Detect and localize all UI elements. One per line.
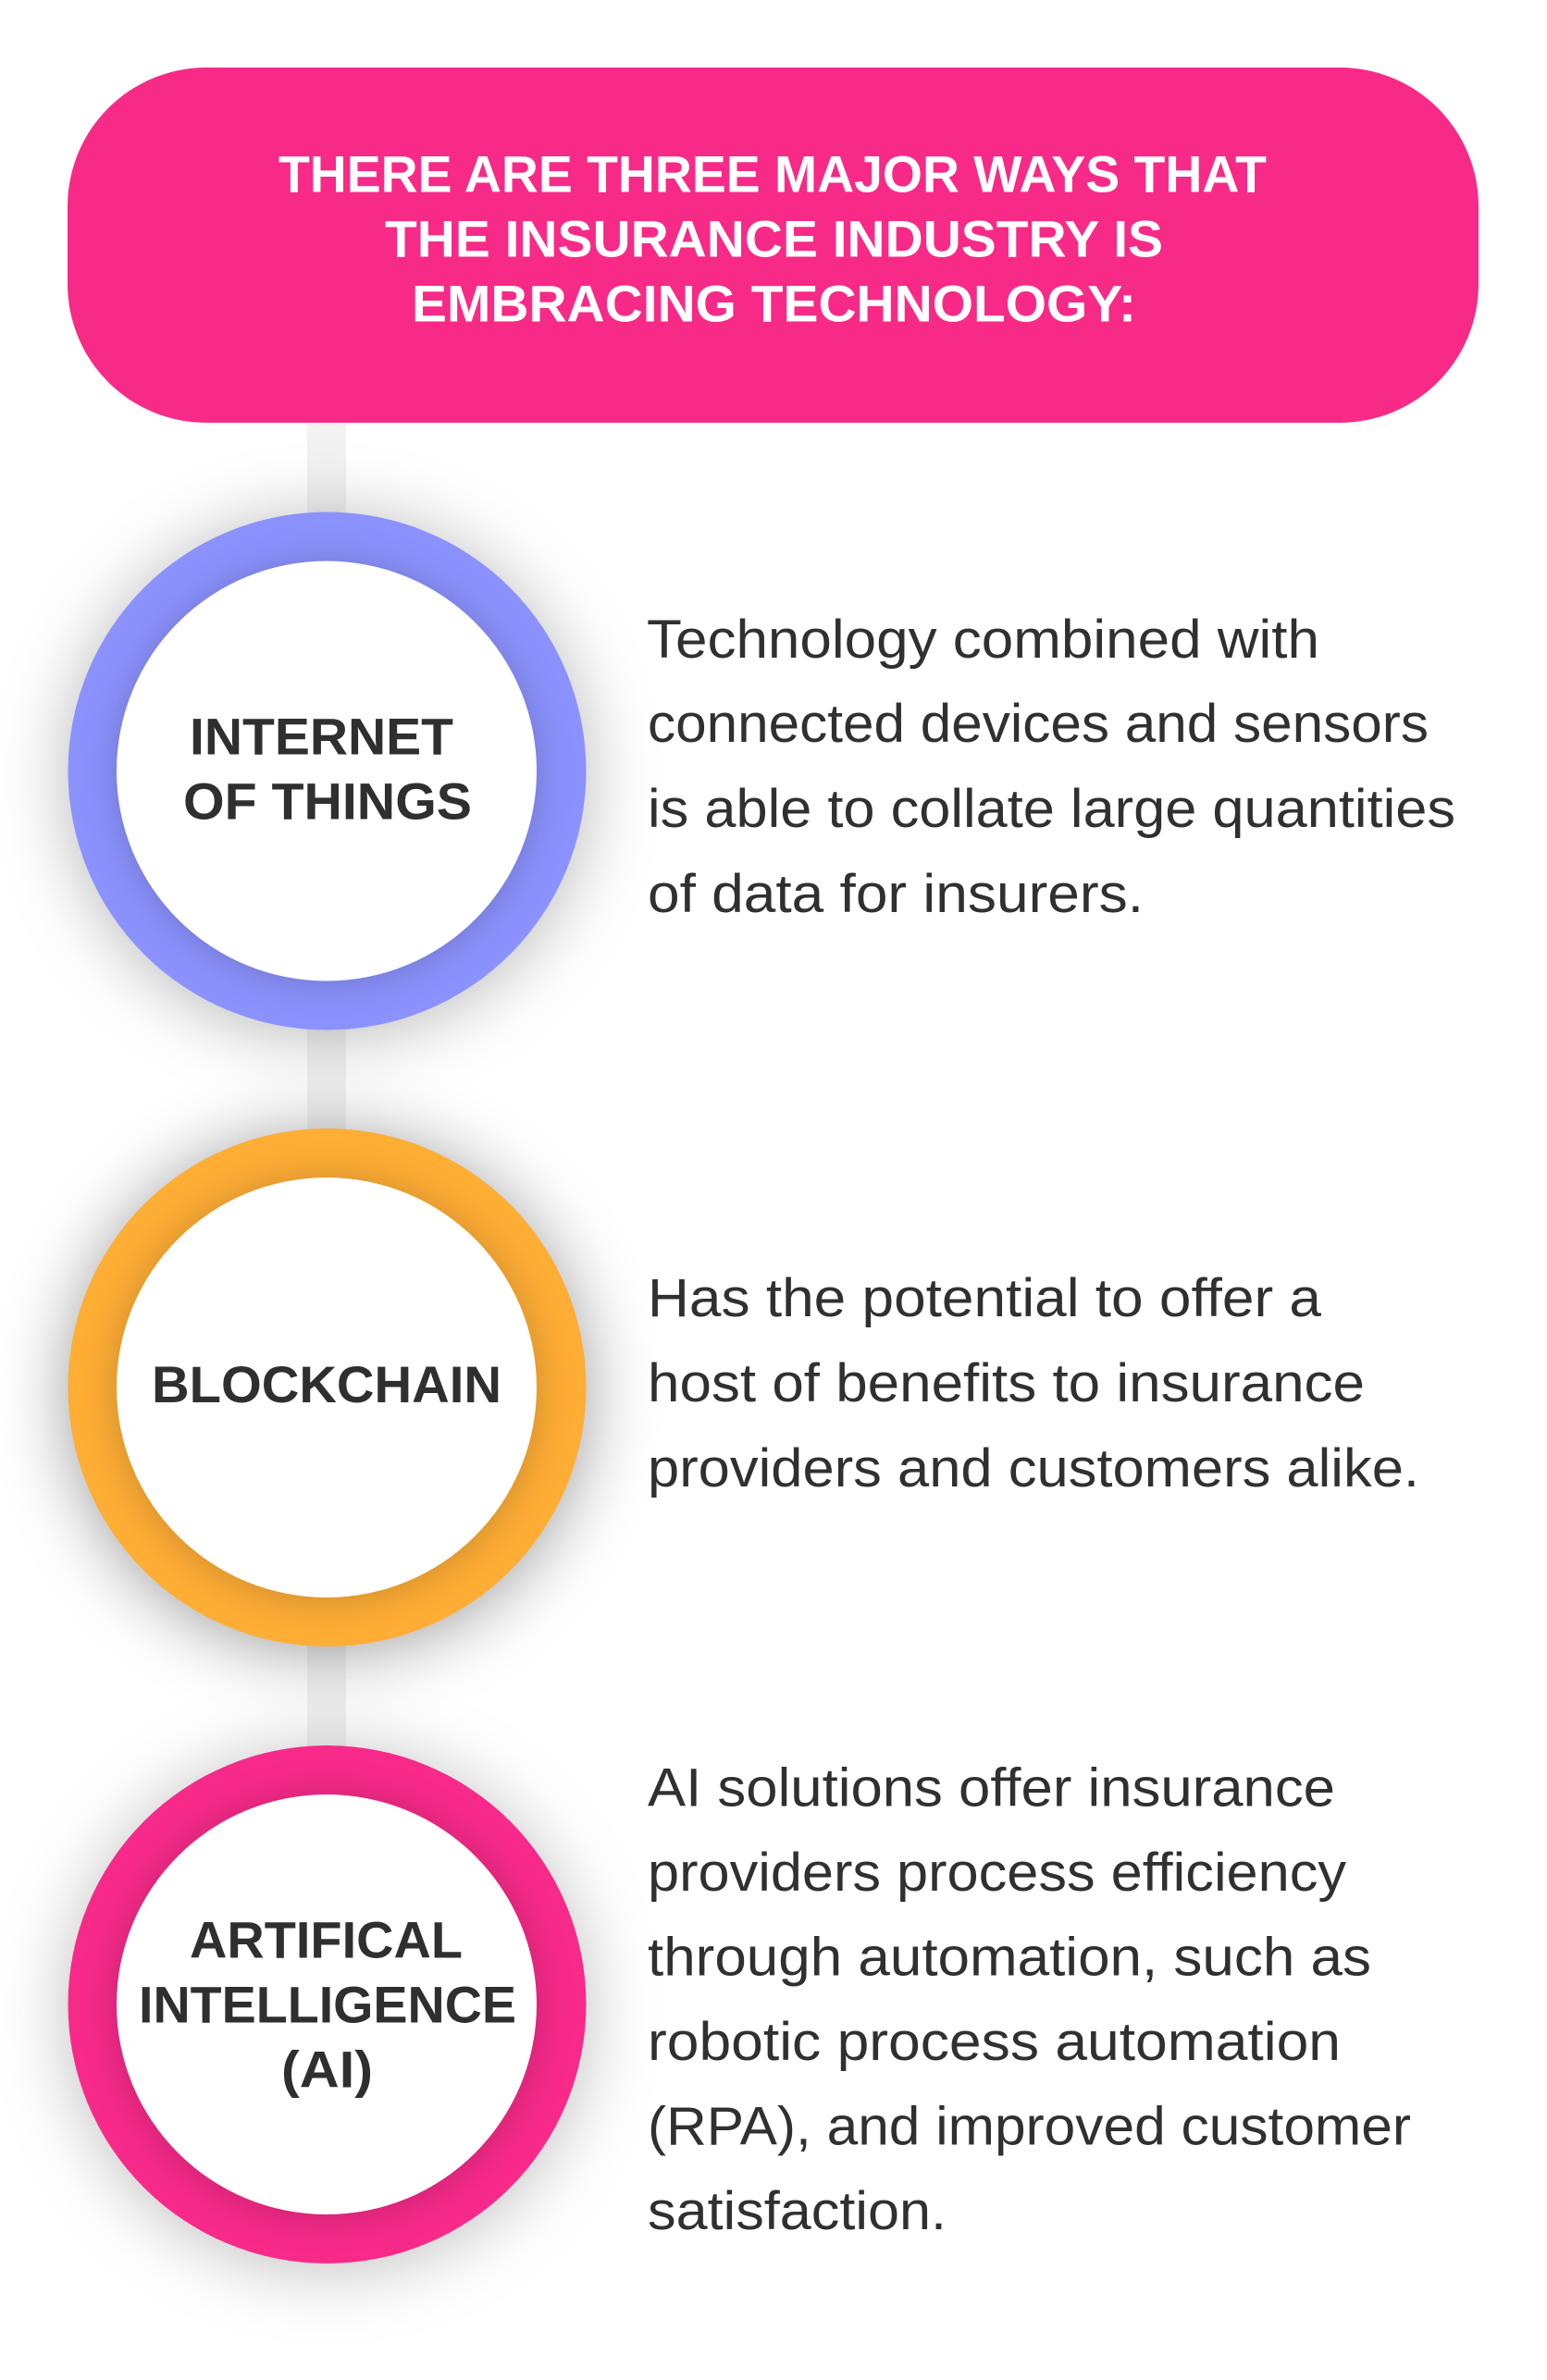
label: blockchain: BLOCKCHAIN xyxy=(152,1355,501,1413)
panel: blockchain xyxy=(68,1128,587,1646)
description: internet of things: connected devices and sensors xyxy=(648,694,1429,754)
panel: artificial intelligence xyxy=(68,1745,587,2263)
header title: THE INSURANCE INDUSTRY IS xyxy=(385,209,1163,268)
panel: internet of things xyxy=(68,512,587,1030)
ring: internet of things xyxy=(68,512,587,1030)
description: artificial intelligence: satisfaction. xyxy=(648,2181,947,2241)
description: internet of things: of data for insurers. xyxy=(648,864,1144,924)
description: artificial intelligence xyxy=(648,1757,1411,2241)
description: internet of things xyxy=(647,610,1455,924)
ring: blockchain xyxy=(68,1128,587,1646)
header banner xyxy=(68,68,1479,423)
inner disc: internet of things xyxy=(117,561,537,980)
description: blockchain: providers and customers alike. xyxy=(648,1438,1419,1498)
label: artificial intelligence: (AI) xyxy=(281,2041,373,2098)
label: artificial intelligence xyxy=(139,1911,516,2098)
header title: THERE ARE THREE MAJOR WAYS THAT xyxy=(278,144,1267,203)
description: artificial intelligence: AI solutions offer insurance xyxy=(648,1757,1335,1819)
description: artificial intelligence: providers process efficiency xyxy=(648,1843,1346,1903)
label: internet of things: OF THINGS xyxy=(183,771,472,831)
description: blockchain: Has the potential to offer a xyxy=(648,1268,1322,1328)
inner disc: artificial intelligence xyxy=(117,1794,537,2214)
description: blockchain xyxy=(648,1268,1419,1498)
description: blockchain: host of benefits to insurance xyxy=(648,1353,1365,1413)
description: internet of things: Technology combined with xyxy=(647,610,1319,670)
inner disc: blockchain xyxy=(117,1178,537,1597)
description: artificial intelligence: through automation, such as xyxy=(648,1928,1371,1987)
description: artificial intelligence: robotic process automation xyxy=(648,2012,1341,2072)
header title: EMBRACING TECHNOLOGY: xyxy=(412,274,1136,333)
description: artificial intelligence: (RPA), and improved customer xyxy=(648,2096,1411,2157)
label: artificial intelligence: ARTIFICAL xyxy=(190,1911,463,1968)
vertical connector line xyxy=(307,416,346,1767)
header title xyxy=(278,144,1267,333)
label: internet of things xyxy=(183,707,472,831)
label: artificial intelligence: INTELLIGENCE xyxy=(139,1976,516,2033)
label: internet of things: INTERNET xyxy=(190,707,453,766)
ring: artificial intelligence xyxy=(68,1745,587,2263)
description: internet of things: is able to collate large quantities xyxy=(648,779,1455,839)
